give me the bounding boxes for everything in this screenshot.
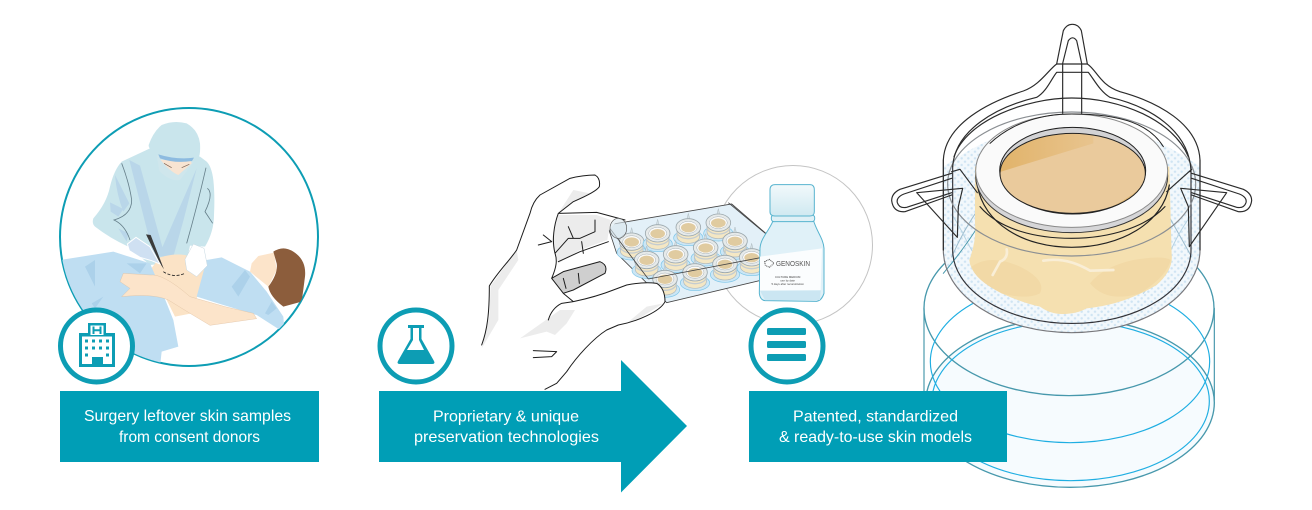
- bottle cap: [770, 185, 814, 216]
- surgeon: [93, 122, 214, 265]
- label text: CULTURE MEDIUM: [775, 275, 801, 279]
- banner: step 3: [749, 391, 1007, 462]
- step 2 text: Proprietary & unique: [433, 408, 579, 426]
- brand logo mark: [765, 259, 774, 267]
- surgeon face and mask: [160, 160, 192, 175]
- surgeon left glove: [127, 237, 160, 264]
- surgeon gown: [93, 148, 214, 265]
- step 3 text: Patented, standardized: [793, 408, 958, 426]
- step 2 text: preservation technologies: [414, 429, 599, 446]
- patient torso: [152, 254, 204, 317]
- white ring and tan disc: [976, 114, 1168, 233]
- plate wells: [617, 209, 766, 297]
- arrow: step 2 banner: [379, 360, 687, 492]
- illustration: culture medium bottle: [759, 185, 824, 301]
- icon: layers: [751, 310, 823, 382]
- label text: use by date: [780, 278, 795, 282]
- insert holder with tab: [943, 24, 1200, 250]
- icon: flask: [380, 310, 452, 382]
- hand fill: [473, 175, 665, 389]
- skin tissue sample: [969, 167, 1172, 314]
- finger shading: [482, 190, 663, 348]
- left handle: [892, 169, 977, 237]
- patient face and neck: [250, 253, 277, 287]
- bottle neck: [771, 215, 815, 222]
- patient drape: [60, 252, 178, 367]
- bottle label: [760, 248, 822, 291]
- step 1 text: Surgery leftover skin samples: [84, 408, 291, 425]
- plate body: [607, 204, 783, 303]
- incision marks: [163, 272, 185, 275]
- banner: step 1: [60, 391, 319, 462]
- hand outline: [482, 175, 665, 389]
- illustration: surgeon and patient in circle: [60, 108, 318, 367]
- illustration: well plate: [607, 203, 783, 303]
- right handle: [1167, 169, 1252, 247]
- icon: hospital: [60, 310, 132, 382]
- scalpel: [146, 234, 164, 269]
- illustration: hand holding plate: [473, 175, 665, 389]
- label text: 5 days after reconstitution: [771, 282, 804, 286]
- surgeon headband: [158, 154, 194, 162]
- lower culture dish: [924, 257, 1214, 487]
- dotted membrane insert: [943, 122, 1200, 333]
- scene clipped to circle: [60, 122, 305, 367]
- insert walls: [943, 112, 1200, 333]
- fingertip over plate: [610, 218, 627, 238]
- large thin circle behind bottle: [714, 166, 872, 324]
- surgeon cap: [149, 122, 200, 160]
- brand name: GENOSKIN: [776, 259, 810, 268]
- circle outline: [60, 108, 318, 366]
- illustration: skin model insert in culture dish: [892, 24, 1252, 487]
- patient hair: [268, 248, 305, 307]
- step 3 text: & ready-to-use skin models: [779, 429, 972, 446]
- surgeon right glove: [185, 244, 207, 277]
- bottle body: [759, 220, 824, 301]
- patient gown: [197, 257, 284, 330]
- step 1 text: from consent donors: [119, 429, 260, 446]
- patient arm: [120, 273, 257, 325]
